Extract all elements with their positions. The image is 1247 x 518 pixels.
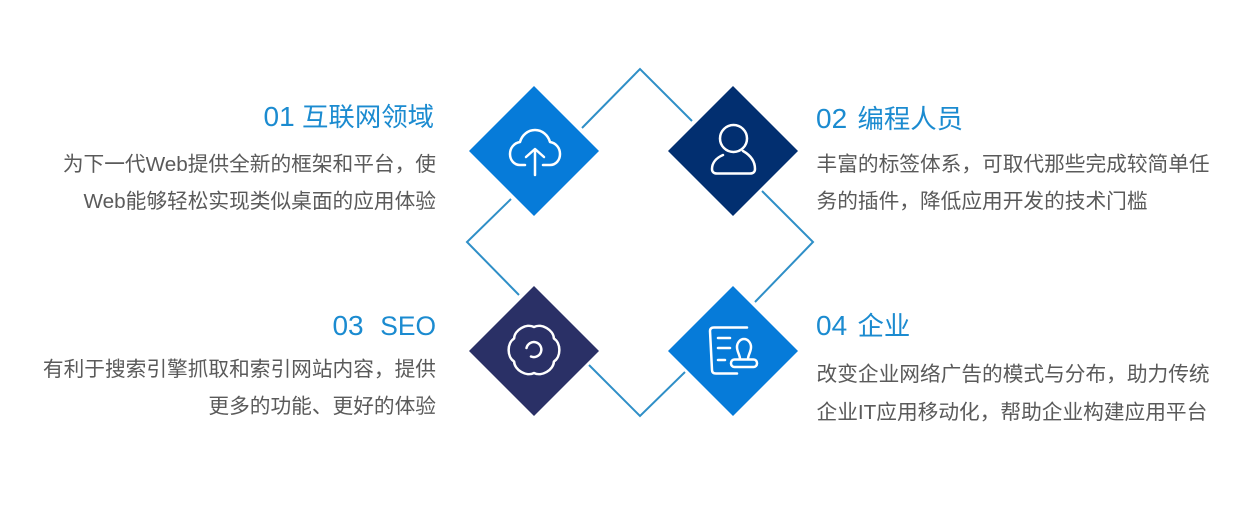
icon: cloud upload bbox=[510, 130, 560, 175]
icon: document and stamp bbox=[710, 328, 757, 374]
panel: 03 SEO bbox=[43, 310, 436, 418]
diamond: 04 bbox=[668, 286, 798, 416]
text: 01 line 2: Web能够轻松实现类似桌面的应用体验 bbox=[84, 190, 436, 213]
panel: 01 互联网领域 bbox=[63, 101, 436, 213]
text: 02 line 2: 务的插件，降低应用开发的技术门槛 bbox=[816, 190, 1148, 213]
heading: 01: 01 互联网领域 bbox=[264, 101, 434, 132]
text: 01 line 1: 为下一代Web提供全新的框架和平台，使 bbox=[63, 153, 436, 176]
diamond: 01 bbox=[469, 86, 599, 216]
connector: bottom bbox=[589, 365, 685, 416]
diamond: 02 bbox=[668, 86, 798, 216]
icon: gear bbox=[509, 326, 559, 374]
panel: 04 企业 bbox=[816, 310, 1210, 424]
panel: 02 编程人员 bbox=[816, 103, 1210, 213]
diamond: 03 bbox=[469, 286, 599, 416]
connector: right bbox=[755, 191, 813, 302]
connector: left bbox=[467, 199, 519, 295]
heading: 04: 04 企业 bbox=[816, 310, 910, 341]
text: 03 line 1: 有利于搜索引擎抓取和索引网站内容，提供 bbox=[43, 358, 436, 381]
text: 02 line 1: 丰富的标签体系，可取代那些完成较简单任 bbox=[816, 153, 1210, 176]
heading: 02: 02 编程人员 bbox=[816, 103, 963, 134]
icon: person bbox=[712, 125, 755, 174]
heading: 03: 03 SEO bbox=[332, 310, 436, 341]
text: 03 line 2: 更多的功能、更好的体验 bbox=[208, 395, 436, 418]
text: 04 line 2: 企业IT应用移动化，帮助企业构建应用平台 bbox=[816, 401, 1207, 424]
connector: top bbox=[582, 69, 692, 128]
text: 04 line 1: 改变企业网络广告的模式与分布，助力传统 bbox=[816, 363, 1210, 386]
